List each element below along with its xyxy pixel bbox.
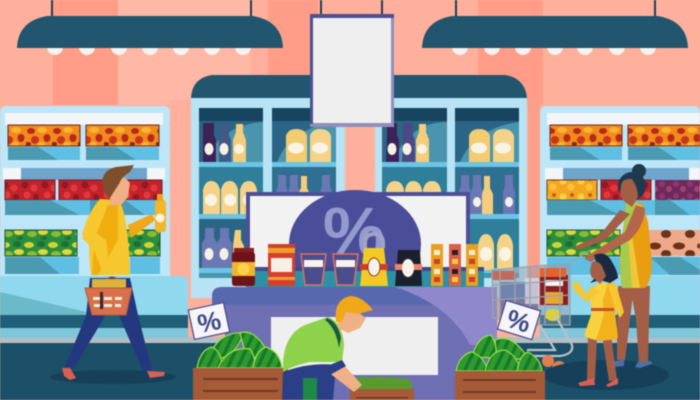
crate: right watermelons [455,335,545,400]
panel: display table [212,287,497,400]
figure: man with basket [62,165,166,380]
figure: girl [573,254,624,387]
jars: cream jars middle row [203,181,257,214]
gardener legs [282,364,336,400]
woman legs [617,286,650,362]
woman head [618,164,646,207]
shopping cart [492,250,590,375]
shadow: woman and girl [543,360,669,390]
bottles: small bottles middle row right [276,175,332,214]
tag: left percent sign card: % [195,305,224,339]
tag: right percent sign card [497,300,541,341]
gardener head [336,296,373,333]
box: black product box [395,250,422,286]
jar: dark red with gold label [232,248,255,286]
gardener torso [283,317,344,372]
woman arms [574,210,630,250]
girl arms [573,282,600,302]
floor [0,337,700,400]
panel: discount display board [246,190,484,298]
cup: coffee cup two [333,254,358,285]
products row [232,234,478,286]
panel: left shelving unit [191,75,345,298]
tag: right percent sign card: % [503,303,534,339]
girl shoes [578,378,618,387]
crate: middle greens [350,376,414,400]
wheels [542,355,566,375]
tag: left percent sign card [188,303,230,340]
boxes: three tall spice boxes [431,244,478,286]
panel: left fridge [0,106,188,338]
panel: right shelving unit [375,75,527,298]
girl dress [584,283,618,341]
man legs [65,278,152,371]
lamp: left ceiling light [17,0,283,55]
cup: coffee cup one [301,254,326,285]
man torso [82,199,130,275]
man lower arm [82,228,110,276]
bottles: small bottles right unit [459,175,515,214]
figure: gardener bending [282,296,373,400]
hanging sign [310,0,394,127]
girl legs [587,335,617,381]
bottles: dark and cream, top row [203,123,246,162]
bottles: dark and cream, top row right unit [386,123,429,162]
jars: large cream jars top row [286,129,331,162]
panel: right fridge [540,106,700,338]
jars: lower cream jars right unit [478,234,513,270]
crate: left watermelons [193,332,288,400]
big percent sign: % [323,193,385,271]
man arm with bottle [128,194,166,238]
box: red cereal box [268,244,295,286]
bag: yellow bag with handle [360,234,388,286]
gardener arm [328,364,362,392]
woman shoes [612,360,652,368]
man shoes [62,368,165,380]
man head [102,165,134,206]
jars: large cream jars right unit [469,129,514,162]
bottles: lower row [202,228,244,268]
girl head [590,254,618,284]
basket [85,277,132,315]
figure: woman [574,164,652,368]
woman dress [620,203,652,288]
jars: cream jars middle row right unit [386,181,441,214]
shadow: man [50,370,176,384]
lamp: right ceiling light [422,0,688,55]
